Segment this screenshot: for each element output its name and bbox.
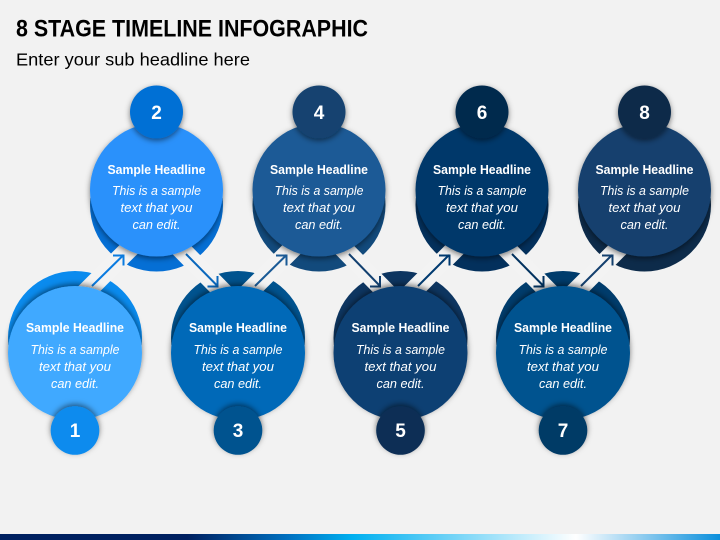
stage 6: Sample Headline [433,163,531,177]
arrow 5 to 6 [418,255,450,286]
stage 4: can edit. [295,217,343,232]
stage 2 [90,86,223,256]
stage 1: text that you [39,359,111,374]
arrow 7 to 8 [581,255,612,286]
title: 8 STAGE TIMELINE INFOGRAPHIC [16,16,368,42]
stage 1: 1 [70,421,81,442]
back discs [8,138,711,405]
stage 5: 5 [395,421,406,442]
stage 3: can edit. [214,376,262,391]
stage 2: can edit. [132,217,180,232]
stage 7: text that you [527,359,599,374]
stage 5 [334,286,468,455]
stage 5: text that you [364,359,436,374]
stage 8: text that you [608,200,680,215]
arrow 1 to 2 [92,255,124,286]
bottom gradient bar [0,534,720,540]
arrow 6 to 7 [512,254,544,286]
stage 4: text that you [283,200,355,215]
stage 3: Sample Headline [189,321,287,335]
stage 3 [171,286,305,455]
stage 8: Sample Headline [596,163,694,177]
stage 2: Sample Headline [108,163,206,177]
stage 6 [416,86,548,256]
arrow 3 to 4 [255,255,286,286]
stage 6: This is a sample [438,183,526,198]
stage 1: Sample Headline [26,321,124,335]
stage 4: 4 [314,103,325,124]
stage 3: text that you [202,359,274,374]
stage 7: This is a sample [518,342,608,357]
stage 2: 2 [151,103,162,124]
stage 5: Sample Headline [352,321,450,335]
subtitle: Enter your sub headline here [16,50,250,70]
stage 7: can edit. [539,376,587,391]
stage 1 [8,286,142,455]
stage 6: text that you [446,200,518,215]
stage 1: This is a sample [30,342,120,357]
stage 7 [496,286,630,455]
stage 4 [252,86,386,256]
stage 3: 3 [233,421,243,442]
stage 2: This is a sample [112,183,201,198]
stage 3: This is a sample [194,342,282,357]
stage 8: 8 [639,103,650,124]
stage 8: can edit. [620,217,668,232]
stage 7: 7 [558,421,568,442]
stage 7: Sample Headline [514,321,612,335]
stage 4: Sample Headline [270,163,368,177]
stage 8: This is a sample [600,183,689,198]
stage 8 [578,86,711,256]
stage 1: can edit. [51,376,99,391]
stage 6: 6 [477,103,487,124]
connector gaps cut through back discs [80,238,629,301]
arrow 4 to 5 [349,254,380,286]
stage 5: can edit. [376,376,424,391]
stage 6: can edit. [458,217,506,232]
stage 2: text that you [120,200,192,215]
stage 4: This is a sample [274,183,364,198]
stage 5: This is a sample [356,342,445,357]
arrow 2 to 3 [186,254,218,286]
